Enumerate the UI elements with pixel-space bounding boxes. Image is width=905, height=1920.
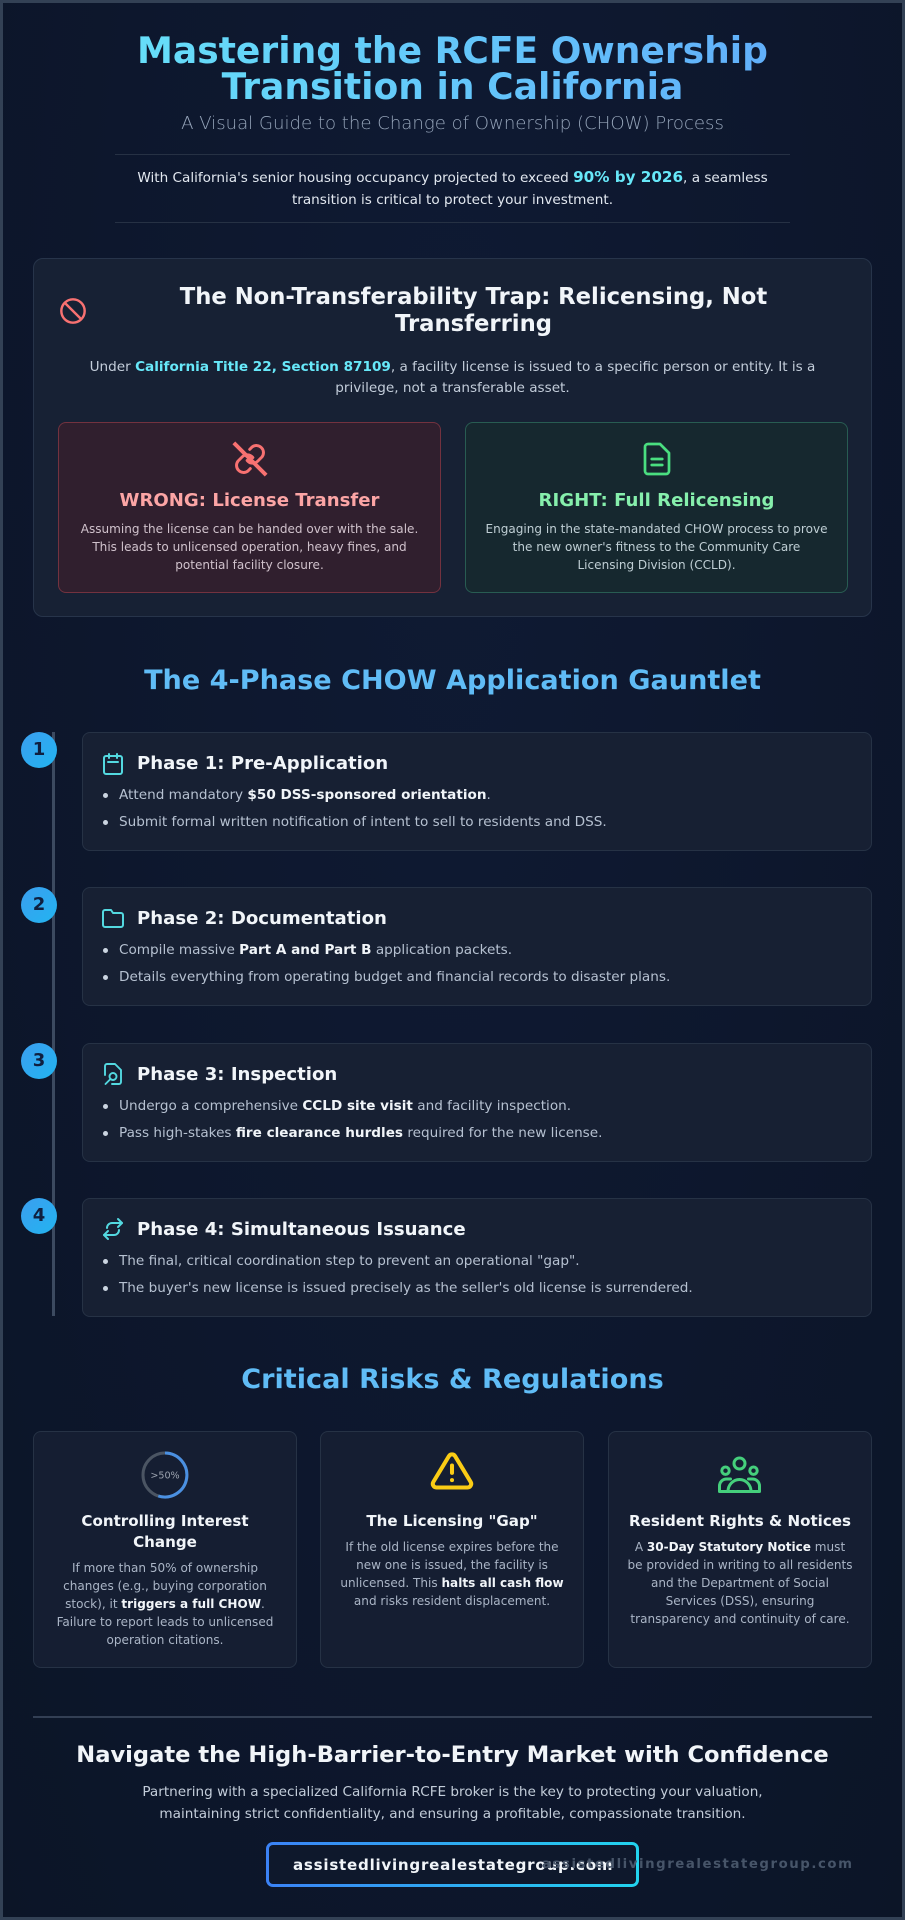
phase 1 title: Phase 1: Pre-Application [137, 753, 388, 774]
panel description [90, 359, 815, 396]
watermark url: assistedlivingrealestategroup.com [542, 1857, 854, 1872]
panel description: privilege, not a transferable asset. [335, 380, 570, 396]
panel heading [180, 284, 767, 337]
icon: warning triangle [430, 1452, 474, 1490]
wrong title: WRONG: License Transfer [120, 490, 379, 511]
phase 3 number [21, 1043, 57, 1079]
phase 2 card [82, 887, 872, 1006]
wrong text: Assuming the license can be handed over with the sale. [81, 522, 418, 536]
card text [628, 1540, 852, 1626]
phase 4 number: 4 [33, 1205, 45, 1226]
icon: folder [102, 909, 124, 928]
phase 4 card: The buyer's new license is issued precisely as the seller's old license is surrendered. [119, 1280, 693, 1296]
card text: If the old license expires before the [345, 1540, 559, 1554]
button text: assistedlivingrealestategroup.com [293, 1856, 613, 1874]
right text: Engaging in the state-mandated CHOW process to prove [485, 522, 828, 536]
panel heading: The Non-Transferability Trap: Relicensing, Not [180, 284, 767, 310]
card text: Services (DSS), ensuring [666, 1594, 814, 1608]
intro text: With California's senior housing occupancy projected to exceed 90% by 2026, a seamless [137, 168, 768, 186]
phase 4 card: The final, critical coordination step to prevent an operational "gap". [119, 1253, 580, 1269]
card text: be provided in writing to all residents [628, 1558, 852, 1572]
phase 3 card [82, 1043, 872, 1162]
risk card: controlling interest [33, 1431, 297, 1668]
call to action button [266, 1842, 639, 1887]
card title: Change [133, 1533, 197, 1551]
phase 1 number [21, 732, 57, 768]
card text: new one is issued, the facility is [356, 1558, 548, 1572]
phase 1 card [82, 732, 872, 851]
title: Transition in California [222, 66, 683, 108]
title: Mastering the RCFE Ownership [137, 30, 768, 72]
intro text: transition is critical to protect your investment. [292, 192, 613, 208]
icon: file search [104, 1063, 122, 1085]
phase 3 card: Pass high-stakes fire clearance hurdles required for the new license. [119, 1125, 602, 1141]
icon: 50 percent ring: >50% [150, 1470, 180, 1482]
right text: the new owner's fitness to the Community Care [513, 540, 800, 554]
risk card: licensing gap [320, 1431, 584, 1668]
phase 2 bullet 1 [103, 948, 108, 953]
card text: and risks resident displacement. [354, 1594, 550, 1608]
wrong text: This leads to unlicensed operation, heavy fines, and [92, 540, 407, 554]
wrong text [80, 522, 418, 572]
card title: Resident Rights & Notices [629, 1512, 851, 1530]
footer text [142, 1784, 763, 1822]
phase 4 number [21, 1198, 57, 1234]
phase 1 bullet 1 [103, 793, 108, 798]
icon: people group [718, 1456, 761, 1493]
card text: If more than 50% of ownership [72, 1561, 258, 1575]
section heading: phases: The 4-Phase CHOW Application Gauntlet [144, 665, 761, 696]
subtitle: A Visual Guide to the Change of Ownership (CHOW) Process [181, 113, 724, 134]
card text: transparency and continuity of care. [630, 1612, 850, 1626]
icon: swap arrows [103, 1218, 123, 1240]
card title [81, 1512, 249, 1551]
phase 2 bullet 2 [103, 975, 108, 980]
right text: Licensing Division (CCLD). [577, 558, 736, 572]
phase 4 title: Phase 4: Simultaneous Issuance [137, 1219, 466, 1240]
phase 2 number: 2 [33, 894, 45, 915]
footer heading: Navigate the High-Barrier-to-Entry Market with Confidence [76, 1742, 829, 1768]
icon: prohibited [60, 298, 86, 324]
panel heading: Transferring [395, 311, 552, 337]
phase 4 card [82, 1198, 872, 1317]
phase 2 title: Phase 2: Documentation [137, 908, 387, 929]
card text: operation citations. [107, 1633, 223, 1647]
footer text: Partnering with a specialized California RCFE broker is the key to protecting your valuation, [142, 1784, 763, 1800]
phase 3 title: Phase 3: Inspection [137, 1064, 337, 1085]
phase 4 bullet 2 [103, 1286, 108, 1291]
risk card: resident rights [608, 1431, 872, 1668]
phase 2 number [21, 887, 57, 923]
phase 1 number: 1 [33, 739, 45, 760]
footer text: maintaining strict confidentiality, and ensuring a profitable, compassionate transition. [159, 1806, 746, 1822]
section heading: risks: Critical Risks & Regulations [241, 1364, 664, 1395]
right text [485, 522, 828, 572]
card text: unlicensed. This halts all cash flow [340, 1576, 564, 1590]
wrong box [58, 422, 441, 593]
right title: RIGHT: Full Relicensing [539, 490, 774, 511]
intro text [137, 168, 768, 208]
wrong text: potential facility closure. [175, 558, 324, 572]
title [0, 33, 905, 105]
icon: calendar [103, 753, 123, 775]
icon: 50 percent ring [142, 1452, 188, 1499]
card text: stock), it triggers a full CHOW. [65, 1597, 265, 1611]
phase 3 bullet 2 [103, 1131, 108, 1136]
card text: and the Department of Social [651, 1576, 829, 1590]
card title: The Licensing "Gap" [366, 1512, 538, 1530]
card text: changes (e.g., buying corporation [63, 1579, 267, 1593]
phase 4 bullet 1 [103, 1259, 108, 1264]
card text [340, 1540, 564, 1608]
card title: Controlling Interest [81, 1512, 249, 1530]
card text: Failure to report leads to unlicensed [57, 1615, 273, 1629]
phase 1 card: Submit formal written notification of intent to sell to residents and DSS. [119, 814, 607, 830]
phase 1 bullet 2 [103, 820, 108, 825]
card text [57, 1561, 273, 1647]
right box [465, 422, 848, 593]
panel description: Under California Title 22, Section 87109, a facility license is issued to a specific person or entity. It is a [90, 359, 815, 375]
phase 1 card: Attend mandatory $50 DSS-sponsored orientation. [119, 787, 491, 803]
icon: broken link [232, 442, 268, 476]
phase 2 card: Details everything from operating budget and financial records to disaster plans. [119, 969, 670, 985]
phase 3 bullet 1 [103, 1104, 108, 1109]
timeline line [52, 732, 54, 1316]
phase 3 number: 3 [33, 1050, 45, 1071]
panel: non-transferability trap [33, 258, 872, 617]
phase 2 card: Compile massive Part A and Part B application packets. [119, 942, 512, 958]
icon: document [644, 442, 670, 476]
phase 3 card: Undergo a comprehensive CCLD site visit and facility inspection. [119, 1098, 571, 1114]
card text: A 30-Day Statutory Notice must [635, 1540, 845, 1554]
